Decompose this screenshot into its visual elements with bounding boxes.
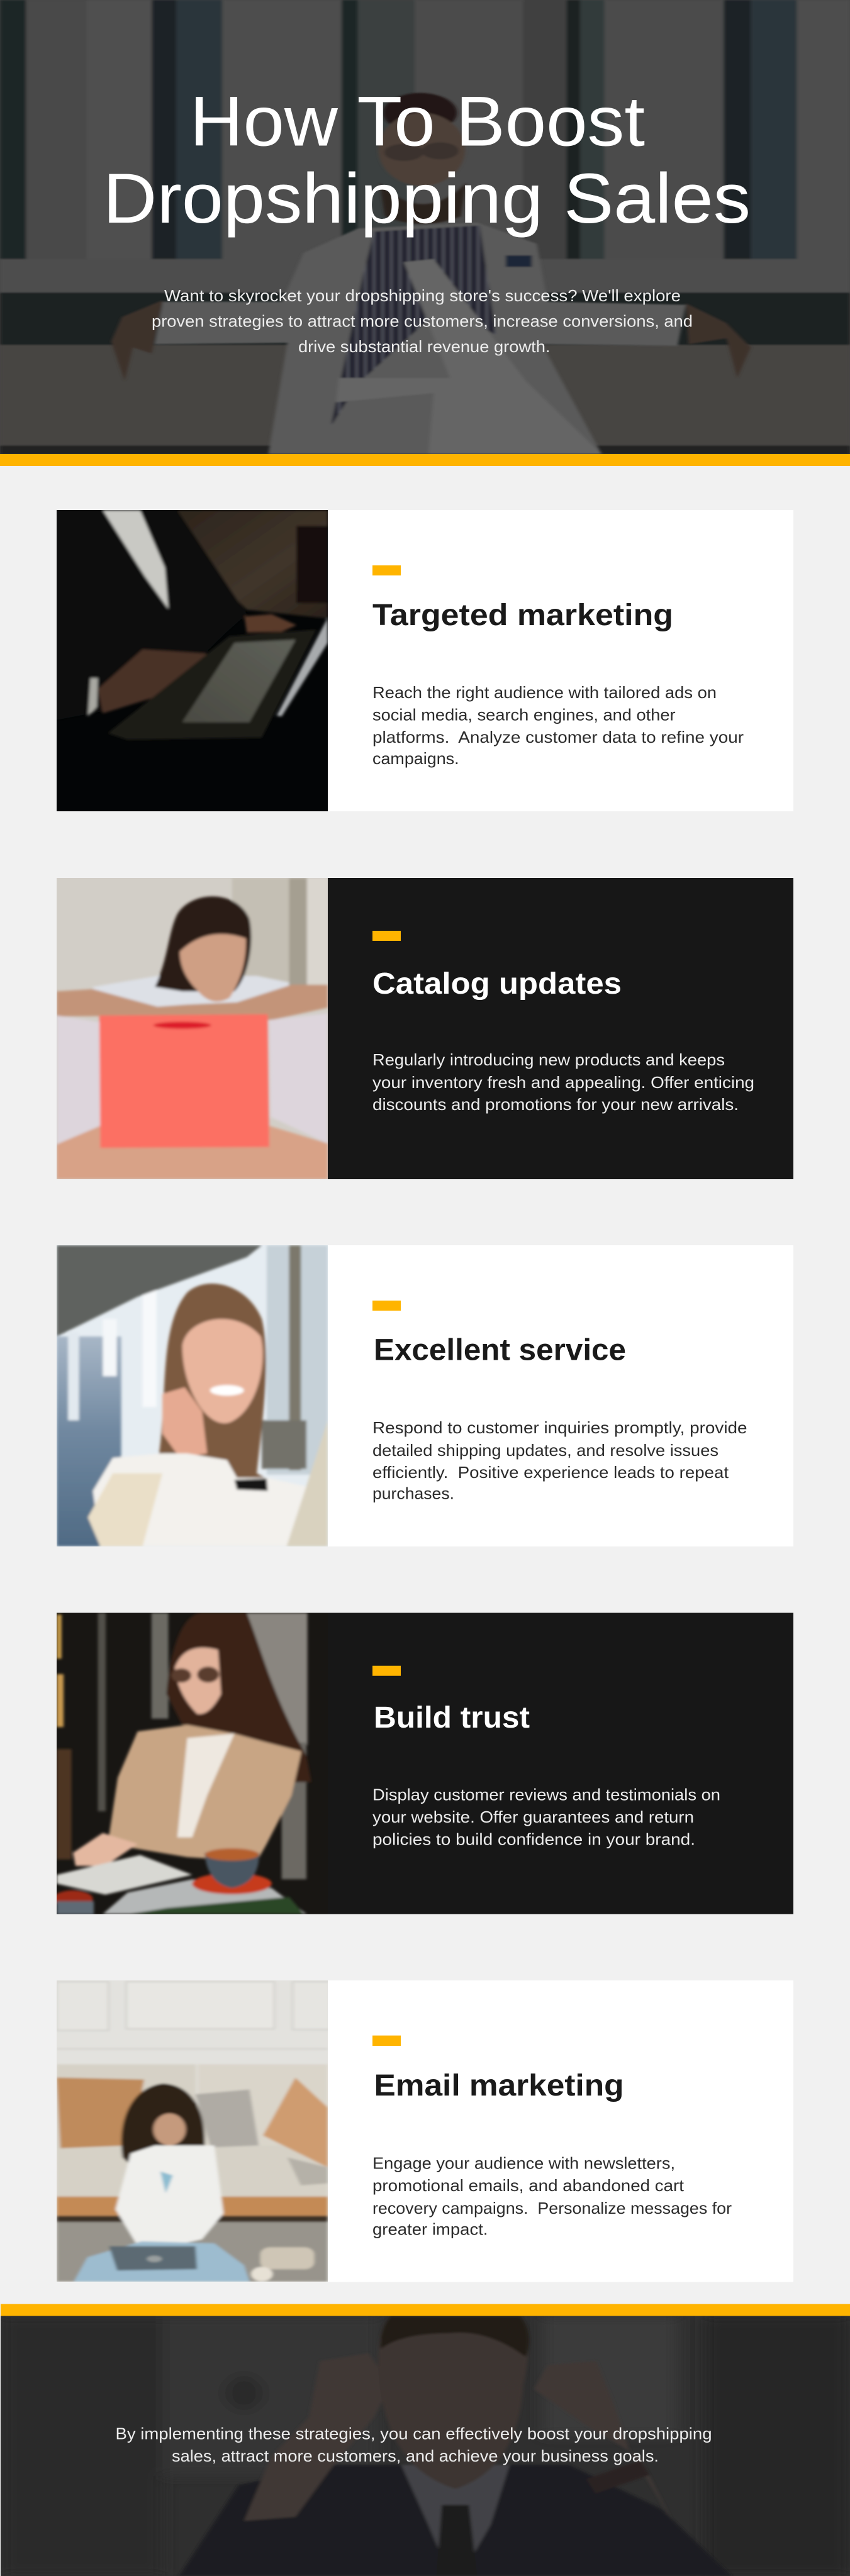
photo: woman with laptop by sofa bbox=[57, 1980, 328, 2282]
footer section bbox=[1, 2304, 850, 2576]
body text: recovery campaigns. Personalize messages for bbox=[372, 2199, 732, 2218]
closing text: sales, attract more customers, and achieve your business goals. bbox=[172, 2446, 659, 2465]
panel: email marketing bbox=[57, 1980, 793, 2282]
body text: Engage your audience with newsletters, bbox=[372, 2154, 675, 2173]
body text bbox=[372, 1418, 747, 1503]
photo: hands on laptop bbox=[57, 510, 328, 811]
closing text bbox=[116, 2424, 712, 2465]
body text bbox=[372, 683, 744, 768]
body text: efficiently. Positive experience leads to repeat bbox=[372, 1463, 729, 1482]
photo: woman writing with tea bbox=[57, 1613, 312, 1914]
shirt bbox=[331, 226, 496, 426]
footer accent bar bbox=[1, 2304, 850, 2316]
body text: your inventory fresh and appealing. Offer enticing bbox=[372, 1073, 754, 1092]
body text: promotional emails, and abandoned cart bbox=[372, 2176, 685, 2195]
body text: Respond to customer inquiries promptly, provide bbox=[372, 1418, 747, 1437]
photo: smiling woman on phone bbox=[57, 1245, 328, 1546]
footer photo: man with raised fists bbox=[1, 2316, 850, 2576]
body text: greater impact. bbox=[372, 2220, 488, 2239]
hero accent bar bbox=[0, 454, 850, 466]
accent mark bbox=[372, 565, 401, 575]
body text bbox=[372, 1050, 754, 1114]
panel: excellent service bbox=[57, 1245, 793, 1546]
body text: Reach the right audience with tailored ads on bbox=[372, 683, 717, 702]
heading: Targeted marketing bbox=[372, 599, 673, 632]
accent mark bbox=[372, 1666, 401, 1676]
hero title: How To Boost bbox=[190, 82, 645, 161]
hero intro text: Want to skyrocket your dropshipping store's success? We'll explore bbox=[164, 286, 681, 305]
body text: purchases. bbox=[372, 1484, 454, 1503]
body text: detailed shipping updates, and resolve issues bbox=[372, 1441, 719, 1460]
photo: woman with shopping bag bbox=[57, 878, 328, 1179]
head bbox=[383, 93, 457, 133]
hero intro text: proven strategies to attract more customers, increase conversions, and bbox=[152, 312, 693, 331]
body text bbox=[372, 2154, 732, 2239]
hero intro text bbox=[152, 286, 693, 356]
body text: Regularly introducing new products and keeps bbox=[372, 1050, 725, 1069]
body text: Display customer reviews and testimonials on bbox=[372, 1785, 720, 1804]
panel: build trust bbox=[53, 1613, 793, 1914]
panel: targeted marketing bbox=[57, 510, 793, 811]
pocket square bbox=[506, 255, 532, 267]
jacket bbox=[155, 223, 686, 454]
body text: campaigns. bbox=[372, 749, 459, 768]
heading: Email marketing bbox=[374, 2069, 624, 2102]
accent mark bbox=[372, 2036, 401, 2046]
hero title: Dropshipping Sales bbox=[103, 159, 751, 238]
body text: platforms. Analyze customer data to refine your bbox=[372, 728, 744, 747]
hero title bbox=[103, 82, 751, 238]
hero photo: man on bench bbox=[0, 0, 850, 454]
hero section bbox=[0, 0, 850, 466]
body text: discounts and promotions for your new arrivals. bbox=[372, 1095, 739, 1114]
trousers bbox=[336, 259, 601, 454]
body text: policies to build confidence in your brand. bbox=[372, 1830, 695, 1849]
heading: Catalog updates bbox=[372, 967, 622, 1001]
accent mark bbox=[372, 1301, 401, 1311]
body text bbox=[372, 1785, 720, 1849]
heading: Excellent service bbox=[374, 1334, 626, 1367]
accent mark bbox=[372, 931, 401, 941]
hands bbox=[111, 300, 162, 381]
closing text: By implementing these strategies, you can effectively boost your dropshipping bbox=[116, 2424, 712, 2443]
heading: Build trust bbox=[374, 1701, 530, 1735]
body text: your website. Offer guarantees and return bbox=[372, 1807, 694, 1826]
hero intro text: drive substantial revenue growth. bbox=[298, 337, 550, 356]
panel: catalog updates bbox=[57, 878, 793, 1179]
body text: social media, search engines, and other bbox=[372, 706, 676, 724]
